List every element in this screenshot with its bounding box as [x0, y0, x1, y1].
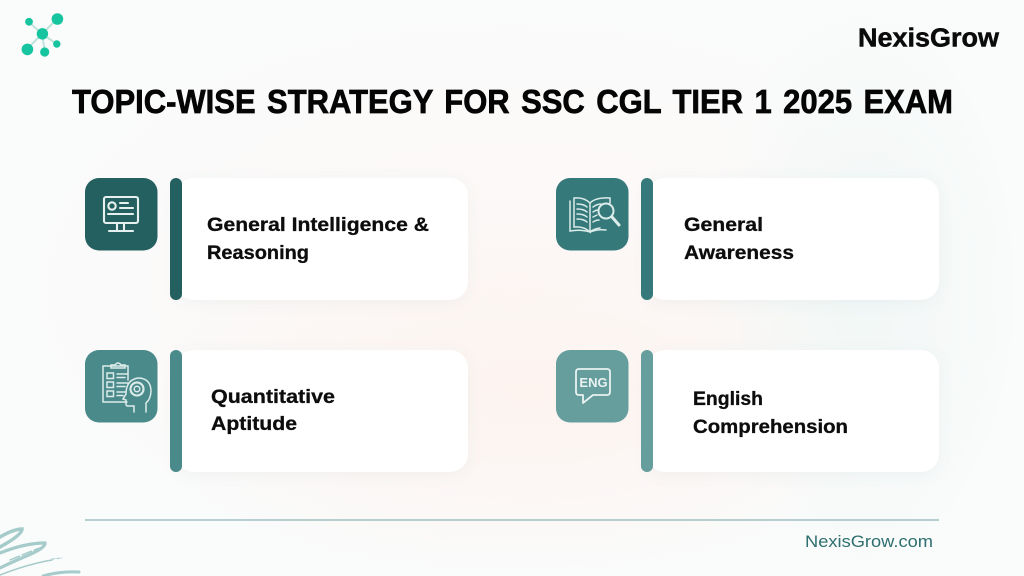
- panel: English Comprehension: [556, 350, 939, 472]
- icon: network logo: [22, 13, 63, 57]
- label: Comprehension: [693, 417, 848, 438]
- icon: open book with magnifier: [556, 178, 628, 250]
- accent bar: [641, 350, 653, 472]
- footer website: NexisGrow.com: [805, 532, 933, 551]
- icon: ENG speech bubble: ENG: [579, 375, 608, 390]
- accent bar: [170, 178, 182, 300]
- label: [684, 215, 794, 264]
- icon: clipboard with gear head: [85, 350, 158, 422]
- panel: Quantitative Aptitude: [85, 350, 468, 472]
- label: General: [684, 215, 763, 236]
- accent bar: [170, 350, 182, 472]
- card background: [176, 178, 468, 300]
- footer divider: [85, 519, 939, 521]
- icon: ENG speech bubble: [556, 350, 628, 422]
- title: TOPIC-WISE STRATEGY FOR SSC CGL TIER 1 2025 EXAM: [72, 83, 953, 120]
- brand name: NexisGrow: [858, 24, 999, 52]
- panel: General Intelligence & Reasoning: [85, 178, 468, 300]
- label: [211, 387, 335, 435]
- icon: computer monitor: [85, 178, 158, 250]
- label: [693, 389, 848, 438]
- card background: [176, 350, 468, 472]
- panel: General Awareness: [556, 178, 939, 300]
- label: [207, 215, 429, 264]
- decorative brush scribble: [0, 529, 79, 576]
- card background: [647, 178, 939, 300]
- label: Awareness: [684, 243, 794, 264]
- accent bar: [641, 178, 653, 300]
- card background: [647, 350, 939, 472]
- label: Quantitative: [211, 387, 335, 408]
- label: Aptitude: [211, 414, 297, 435]
- label: General Intelligence &: [207, 215, 429, 236]
- label: Reasoning: [207, 243, 309, 264]
- label: English: [693, 389, 763, 410]
